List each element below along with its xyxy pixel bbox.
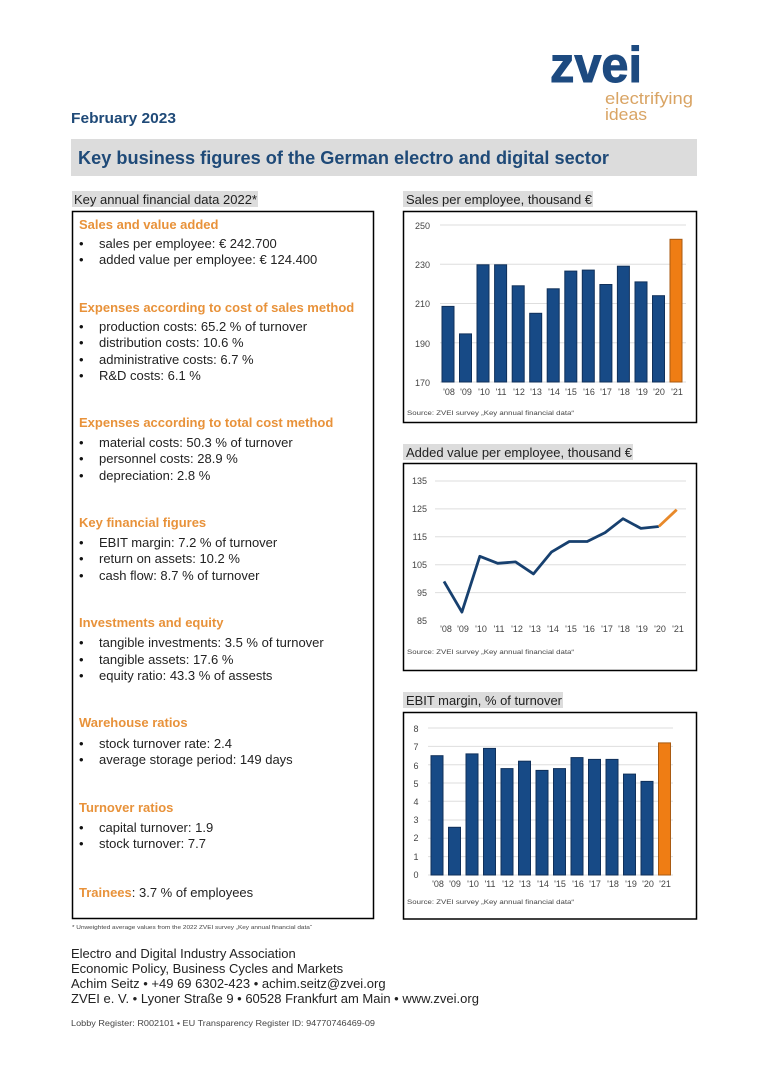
line chart: added value per employee: '18 [618,624,630,634]
section: investments and equity [79,615,324,683]
section: warehouse ratios: • [79,736,84,751]
line chart: added value per employee: '15 [565,624,577,634]
bar chart: sales per employee: 250 [415,221,430,231]
section: sales and value added [79,217,317,267]
section: turnover ratios: • [79,820,84,835]
line chart: added value per employee: '16 [583,624,595,634]
logo: zvei electrifying ideas: ideas [605,105,647,124]
bar chart: sales per employee: '21 [671,387,683,397]
logo: zvei electrifying ideas [550,37,693,124]
section: turnover ratios: • [79,836,84,851]
line chart: added value per employee: '09 [457,624,469,634]
bar chart: sales per employee: 210 [415,299,430,309]
line chart: added value per employee: '12 [511,624,523,634]
section: investments and equity: tangible investments: 3.5 % of turnover [99,635,324,650]
bar chart: EBIT margin: '16 [572,879,584,889]
line chart: added value per employee: 95 [417,588,427,598]
section: cost of sales method [79,300,354,383]
section: total cost method [79,415,333,483]
bar chart: sales per employee: '10 [478,387,490,397]
bar chart: sales per employee: '19 [636,387,648,397]
bar chart: sales per employee: 190 [415,339,430,349]
line chart: added value per employee: '20 [654,624,666,634]
bar chart: EBIT margin: '10 [467,879,479,889]
section: key financial figures: EBIT margin: 7.2 % of turnover [99,535,278,550]
section: total cost method: Expenses according to total cost method [79,415,333,430]
section: investments and equity: equity ratio: 43.3 % of assests [99,668,273,683]
line chart: added value per employee: 135 [412,476,427,486]
bar chart: sales per employee [404,212,696,422]
bar chart: sales per employee: '14 [548,387,560,397]
bar chart: EBIT margin: '18 [607,879,619,889]
footer contact block: ZVEI e. V. • Lyoner Straße 9 • 60528 Frankfurt am Main • www.zvei.org [71,991,479,1006]
bar chart: EBIT margin: '11 [484,879,496,889]
section: turnover ratios [79,800,213,851]
section: cost of sales method: • [79,352,84,367]
panel: key annual financial data [72,212,374,918]
line chart: added value per employee: '21 [672,624,684,634]
line chart: added value per employee: '14 [547,624,559,634]
section: cost of sales method: administrative costs: 6.7 % [99,352,254,367]
bar chart: sales per employee: '17 [600,387,612,397]
bar chart: EBIT margin: '17 [589,879,601,889]
bar chart: EBIT margin: 4 [413,797,419,807]
logo: zvei electrifying ideas: electrifying [605,89,693,108]
panel heading: key annual financial data: Key annual financial data 2022* [74,193,257,207]
bar chart: EBIT margin: 7 [413,742,419,752]
footer contact block: Achim Seitz • +49 69 6302-423 • achim.seitz@zvei.org [71,976,386,991]
footer contact block: Electro and Digital Industry Association [71,946,296,961]
section: key financial figures: • [79,535,84,550]
section: cost of sales method: • [79,335,84,350]
bar chart: EBIT margin: '19 [625,879,637,889]
date: February 2023 [71,110,176,127]
bar chart: EBIT margin: 2 [413,833,419,843]
bar chart: sales per employee: '12 [513,387,525,397]
section: cost of sales method: • [79,319,84,334]
section: investments and equity: • [79,635,84,650]
section: sales and value added: sales per employee: € 242.700 [99,236,277,251]
line chart: added value per employee [404,464,696,670]
bar chart: EBIT margin: '20 [642,879,654,889]
bar chart: EBIT margin: Source: ZVEI survey „Key annual financial data“ [407,899,574,906]
section: key financial figures [79,515,278,583]
section: key financial figures: cash flow: 8.7 % of turnover [99,568,260,583]
section: key financial figures: • [79,568,84,583]
bar chart: EBIT margin: '21 [659,879,671,889]
section: total cost method: personnel costs: 28.9 % [99,451,238,466]
section: total cost method: • [79,435,84,450]
bar chart: EBIT margin: '08 [432,879,444,889]
section: cost of sales method: • [79,368,84,383]
footnote: * Unweighted average values from the 2022 ZVEI survey „Key annual financial data“ [72,925,312,931]
bar chart: EBIT margin: 5 [413,779,419,789]
section: warehouse ratios: • [79,752,84,767]
section: cost of sales method: Expenses according to cost of sales method [79,300,354,315]
section: cost of sales method: R&D costs: 6.1 % [99,368,201,383]
section: total cost method: • [79,451,84,466]
line chart: added value per employee: '19 [636,624,648,634]
section: total cost method: • [79,468,84,483]
footer contact block [71,946,479,1006]
bar chart: sales per employee: 170 [415,378,430,388]
title banner [71,139,697,176]
line chart: added value per employee: 115 [413,532,427,542]
section: sales and value added: • [79,252,84,267]
section: sales and value added: Sales and value added [79,217,219,232]
bar chart: sales per employee: '18 [618,387,630,397]
chart heading: EBIT margin: EBIT margin, % of turnover [406,694,562,708]
section: trainees: Trainees: 3.7 % of employees [79,885,254,900]
logo: zvei electrifying ideas: zvei [550,37,642,93]
section: turnover ratios: stock turnover: 7.7 [99,836,206,851]
bar chart: EBIT margin: 3 [413,815,419,825]
bar chart: EBIT margin: '09 [449,879,461,889]
section: warehouse ratios: stock turnover rate: 2.4 [99,736,232,751]
section: investments and equity: • [79,668,84,683]
line chart: added value per employee: 125 [412,504,427,514]
section: total cost method: depreciation: 2.8 % [99,468,211,483]
lobby register line: Lobby Register: R002101 • EU Transparency Register ID: 94770746469-09 [71,1018,375,1028]
section: cost of sales method: distribution costs: 10.6 % [99,335,244,350]
section: sales and value added: added value per employee: € 124.400 [99,252,317,267]
section: key financial figures: Key financial figures [79,515,206,530]
section: investments and equity: • [79,652,84,667]
line chart: added value per employee: '08 [440,624,452,634]
section: investments and equity: tangible assets: 17.6 % [99,652,234,667]
bar chart: EBIT margin: 0 [413,870,419,880]
bar chart: sales per employee: 230 [415,260,430,270]
bar chart: sales per employee: '08 [443,387,455,397]
line chart: added value per employee: '11 [493,624,505,634]
footer contact block: Economic Policy, Business Cycles and Markets [71,961,344,976]
bar chart: sales per employee: '11 [495,387,507,397]
line chart: added value per employee: '17 [601,624,613,634]
bar chart: EBIT margin: 8 [413,724,419,734]
line chart: added value per employee: 105 [412,560,427,570]
bar chart: EBIT margin: 1 [413,852,419,862]
title banner: Key business figures of the German electro and digital sector [78,148,609,168]
section: cost of sales method: production costs: 65.2 % of turnover [99,319,308,334]
bar chart: EBIT margin: '13 [519,879,531,889]
section: total cost method: material costs: 50.3 % of turnover [99,435,293,450]
section: investments and equity: Investments and equity [79,615,224,630]
bar chart: sales per employee: '16 [583,387,595,397]
bar chart: EBIT margin [404,712,696,919]
bar chart: EBIT margin: '12 [502,879,514,889]
bar chart: sales per employee: '15 [565,387,577,397]
chart heading: added value per employee: Added value per employee, thousand € [406,446,632,460]
bar chart: sales per employee: '09 [460,387,472,397]
section: sales and value added: • [79,236,84,251]
section: turnover ratios: Turnover ratios [79,800,173,815]
line chart: added value per employee: Source: ZVEI survey „Key annual financial data“ [407,649,574,656]
bar chart: EBIT margin: '14 [537,879,549,889]
section: warehouse ratios: average storage period: 149 days [99,752,293,767]
line chart: added value per employee: 85 [417,616,427,626]
bar chart: sales per employee: '20 [653,387,665,397]
line chart: added value per employee: '13 [529,624,541,634]
section: warehouse ratios: Warehouse ratios [79,715,188,730]
bar chart: EBIT margin: '15 [554,879,566,889]
section: turnover ratios: capital turnover: 1.9 [99,820,213,835]
bar chart: sales per employee: '13 [530,387,542,397]
line chart: added value per employee: '10 [475,624,487,634]
section: key financial figures: return on assets: 10.2 % [99,551,240,566]
section: warehouse ratios [79,715,293,767]
chart heading: sales per employee: Sales per employee, thousand € [406,193,592,207]
bar chart: sales per employee: Source: ZVEI survey „Key annual financial data“ [407,410,574,417]
bar chart: EBIT margin: 6 [413,761,419,771]
section: key financial figures: • [79,551,84,566]
